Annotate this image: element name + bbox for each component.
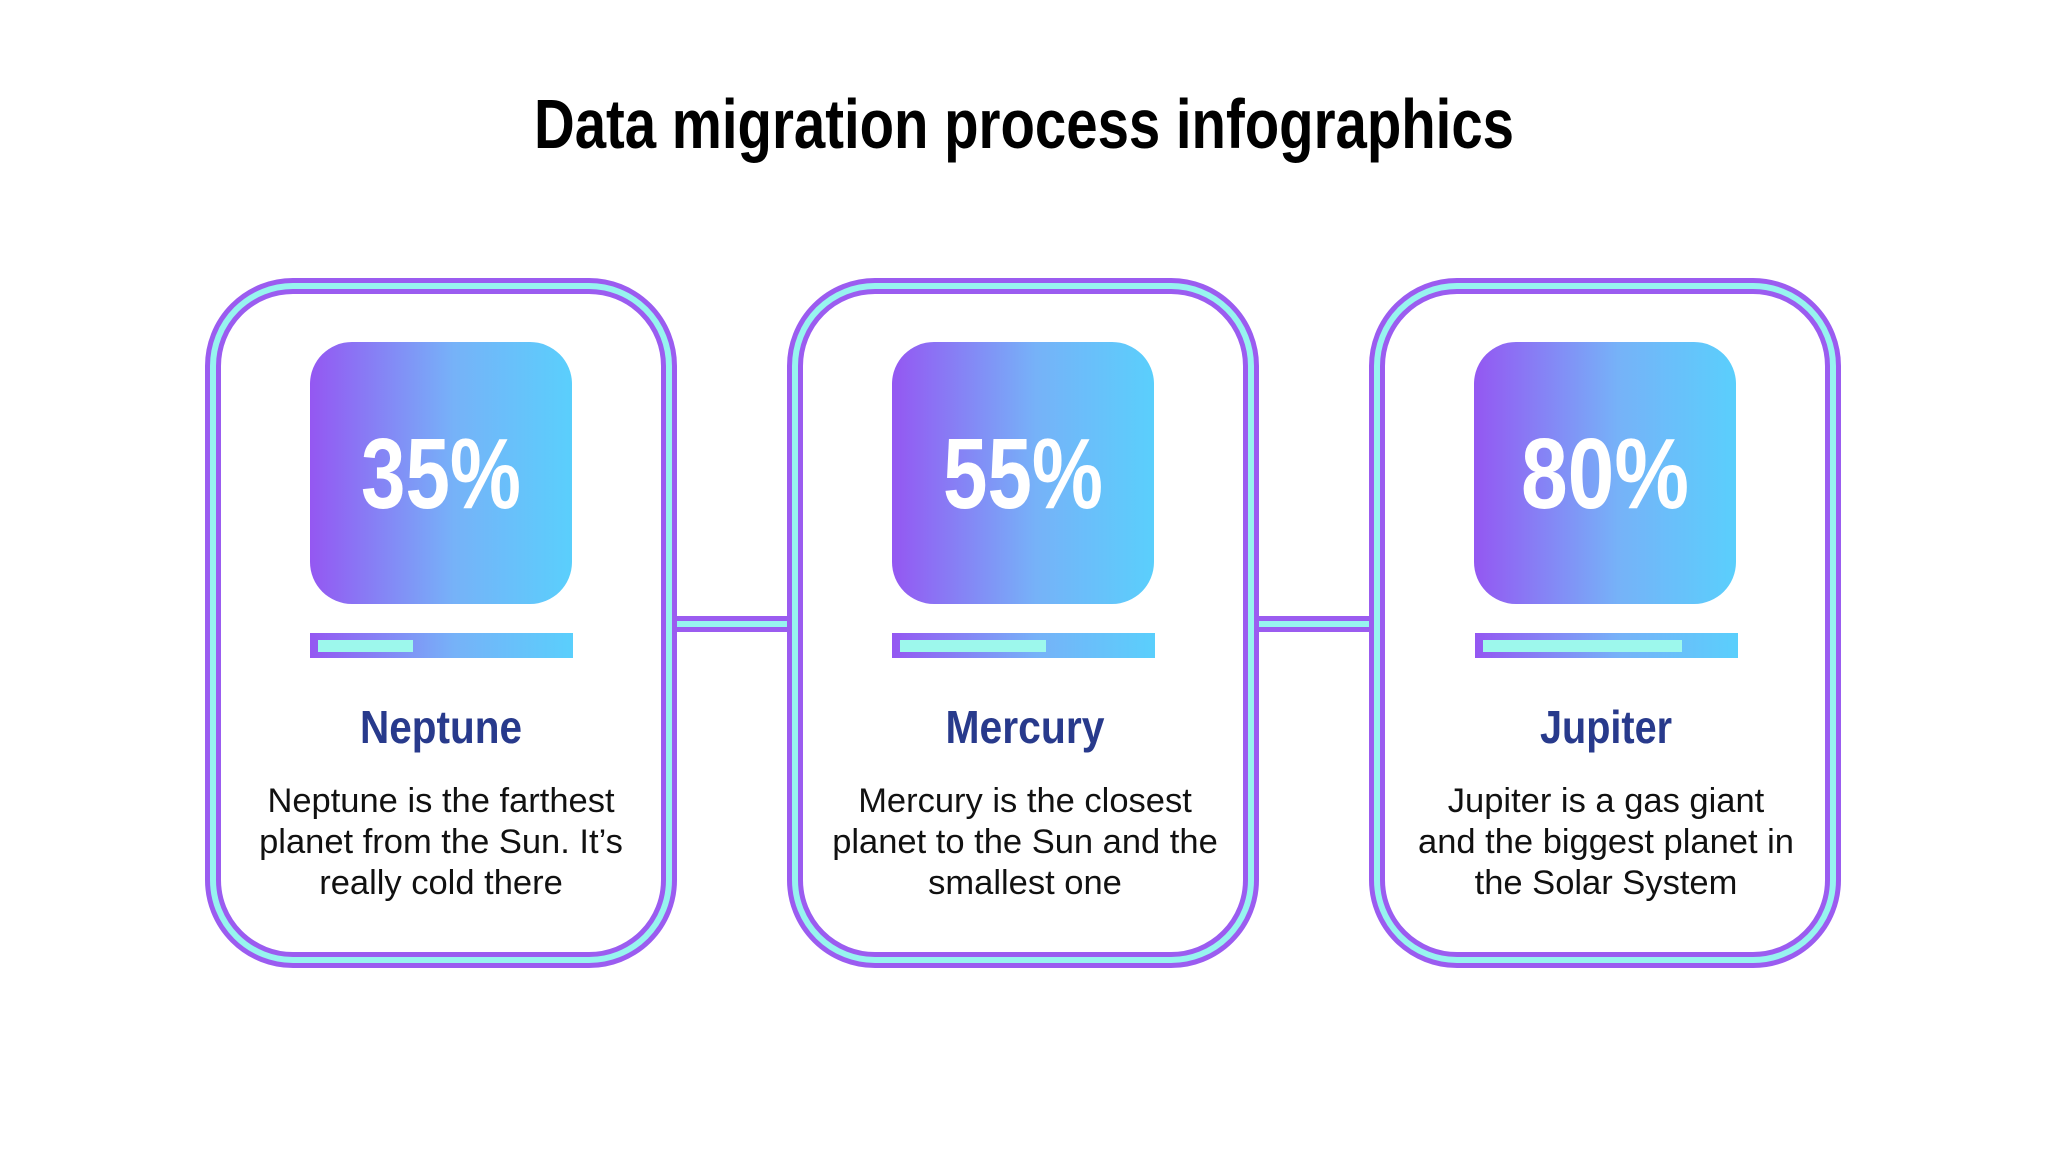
panel: Mercury — [795, 286, 1251, 960]
panel: Jupiter — [1377, 286, 1833, 960]
name: Mercury — [946, 701, 1105, 753]
percent tile — [1474, 342, 1736, 604]
percent tile: 80% — [1521, 418, 1689, 530]
name: Neptune — [360, 701, 522, 753]
description: really cold there — [319, 864, 563, 902]
panel: Neptune — [213, 286, 669, 960]
description: the Solar System — [1475, 864, 1737, 902]
description: Jupiter is a gas giant — [1448, 782, 1765, 820]
connector: card 2 to card 3 — [1251, 616, 1378, 632]
progress bar — [1475, 633, 1738, 658]
progress bar — [310, 633, 573, 658]
percent tile — [310, 342, 572, 604]
percent tile: 55% — [943, 418, 1103, 530]
description: Mercury is the closest — [858, 782, 1192, 820]
title: Data migration process infographics — [534, 85, 1514, 163]
name: Jupiter — [1540, 701, 1672, 753]
percent tile: 35% — [361, 418, 521, 530]
description: planet from the Sun. It’s — [259, 823, 623, 861]
description: planet to the Sun and the — [832, 823, 1218, 861]
connector: card 1 to card 2 — [669, 616, 796, 632]
description: smallest one — [928, 864, 1122, 902]
description: Neptune is the farthest — [267, 782, 615, 820]
description: and the biggest planet in — [1418, 823, 1794, 861]
progress bar — [892, 633, 1155, 658]
percent tile — [892, 342, 1154, 604]
